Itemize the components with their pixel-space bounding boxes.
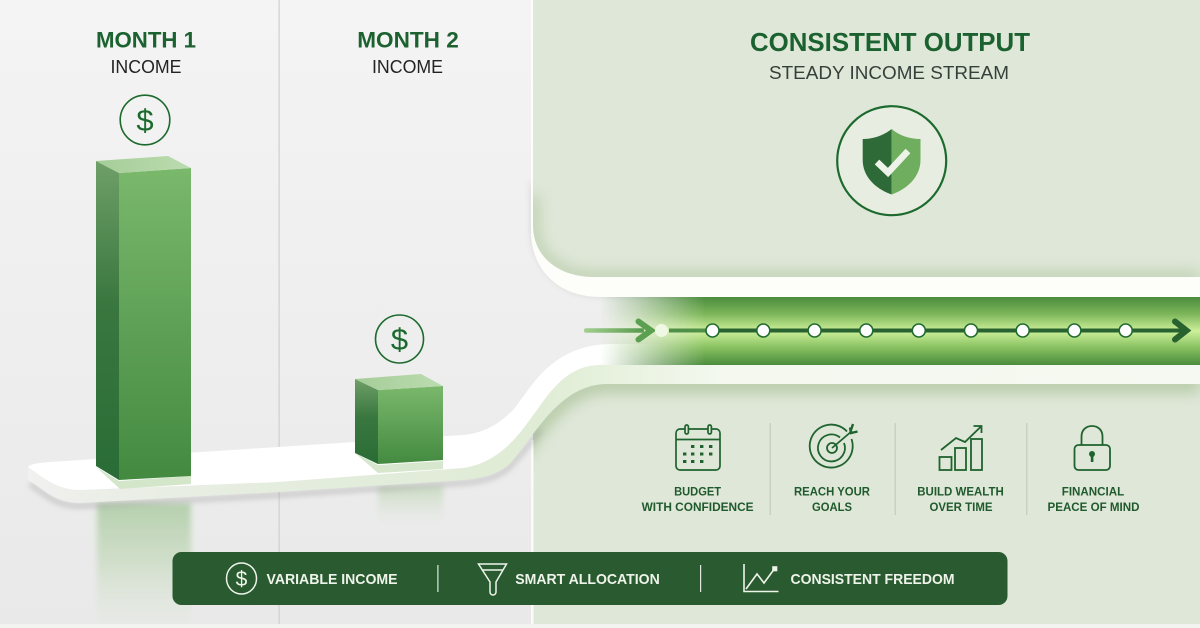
benefit: reach your goals bbox=[794, 424, 870, 514]
glow channel bbox=[600, 297, 1200, 365]
heading: consistent output: CONSISTENT OUTPUT bbox=[750, 27, 1030, 57]
label: consistent freedom: CONSISTENT FREEDOM bbox=[790, 571, 954, 588]
icon: growth bars bbox=[940, 426, 982, 470]
column dividers: benefits bbox=[770, 423, 1027, 515]
icon: dollar month 2 bbox=[376, 315, 424, 363]
icon: dollar month 1: $ bbox=[136, 103, 154, 138]
bottom summary bar bbox=[172, 552, 1008, 605]
heading: month 1: INCOME bbox=[110, 57, 182, 77]
benefit: build wealth over time bbox=[917, 426, 1004, 514]
panel: right green panel upper bbox=[530, 0, 1200, 297]
benefit: budget with confidence bbox=[642, 425, 754, 514]
benefit: build wealth over time: OVER TIME bbox=[930, 500, 992, 514]
icon: calendar bbox=[676, 425, 720, 470]
icon: shield with check bbox=[837, 106, 946, 215]
heading: month 2 bbox=[357, 28, 459, 77]
shadow of month 2 bar on platform bbox=[355, 453, 443, 473]
icon: dollar bbox=[226, 563, 256, 594]
panel: right green panel lower bbox=[513, 375, 1200, 624]
icon: target bbox=[810, 424, 858, 468]
reflection: month 2 bar bbox=[378, 486, 443, 526]
heading: consistent output: STEADY INCOME STREAM bbox=[769, 62, 1009, 83]
arrow: steady income timeline bbox=[655, 322, 1186, 340]
icon: padlock bbox=[1074, 426, 1110, 470]
label: variable income: VARIABLE INCOME bbox=[266, 571, 398, 588]
shadow of month 1 bar on platform bbox=[96, 467, 191, 489]
reflection: month 1 bar bbox=[97, 503, 191, 624]
platform shadow bbox=[30, 430, 540, 506]
benefit: financial peace of mind: FINANCIAL bbox=[1062, 484, 1124, 498]
benefit: reach your goals: GOALS bbox=[812, 500, 852, 514]
heading: consistent output bbox=[750, 27, 1030, 83]
heading: month 1: MONTH 1 bbox=[96, 28, 196, 52]
label: smart allocation: SMART ALLOCATION bbox=[515, 571, 660, 588]
icon: dollar month 2: $ bbox=[391, 322, 408, 357]
icon: dollar month 1 bbox=[120, 95, 170, 145]
chart: month 2 bar bbox=[355, 374, 443, 464]
arrow: incoming flow bbox=[584, 322, 651, 340]
platform: curved ribbon bbox=[28, 344, 1200, 503]
heading: month 2: MONTH 2 bbox=[357, 28, 459, 52]
benefit: budget with confidence: BUDGET bbox=[674, 484, 722, 498]
chart: month 1 bar bbox=[96, 156, 191, 480]
benefit: financial peace of mind bbox=[1048, 426, 1140, 514]
benefit: budget with confidence: WITH CONFIDENCE bbox=[642, 500, 754, 514]
benefit: reach your goals: REACH YOUR bbox=[794, 484, 870, 498]
heading: month 2: INCOME bbox=[372, 57, 443, 77]
icon: dollar: $ bbox=[236, 568, 248, 591]
icon: funnel bbox=[478, 564, 506, 595]
benefit: financial peace of mind: PEACE OF MIND bbox=[1048, 500, 1140, 514]
benefit: build wealth over time: BUILD WEALTH bbox=[917, 484, 1004, 498]
icon: line chart bbox=[744, 564, 778, 592]
heading: month 1 bbox=[96, 28, 196, 77]
divider between months bbox=[278, 0, 280, 624]
